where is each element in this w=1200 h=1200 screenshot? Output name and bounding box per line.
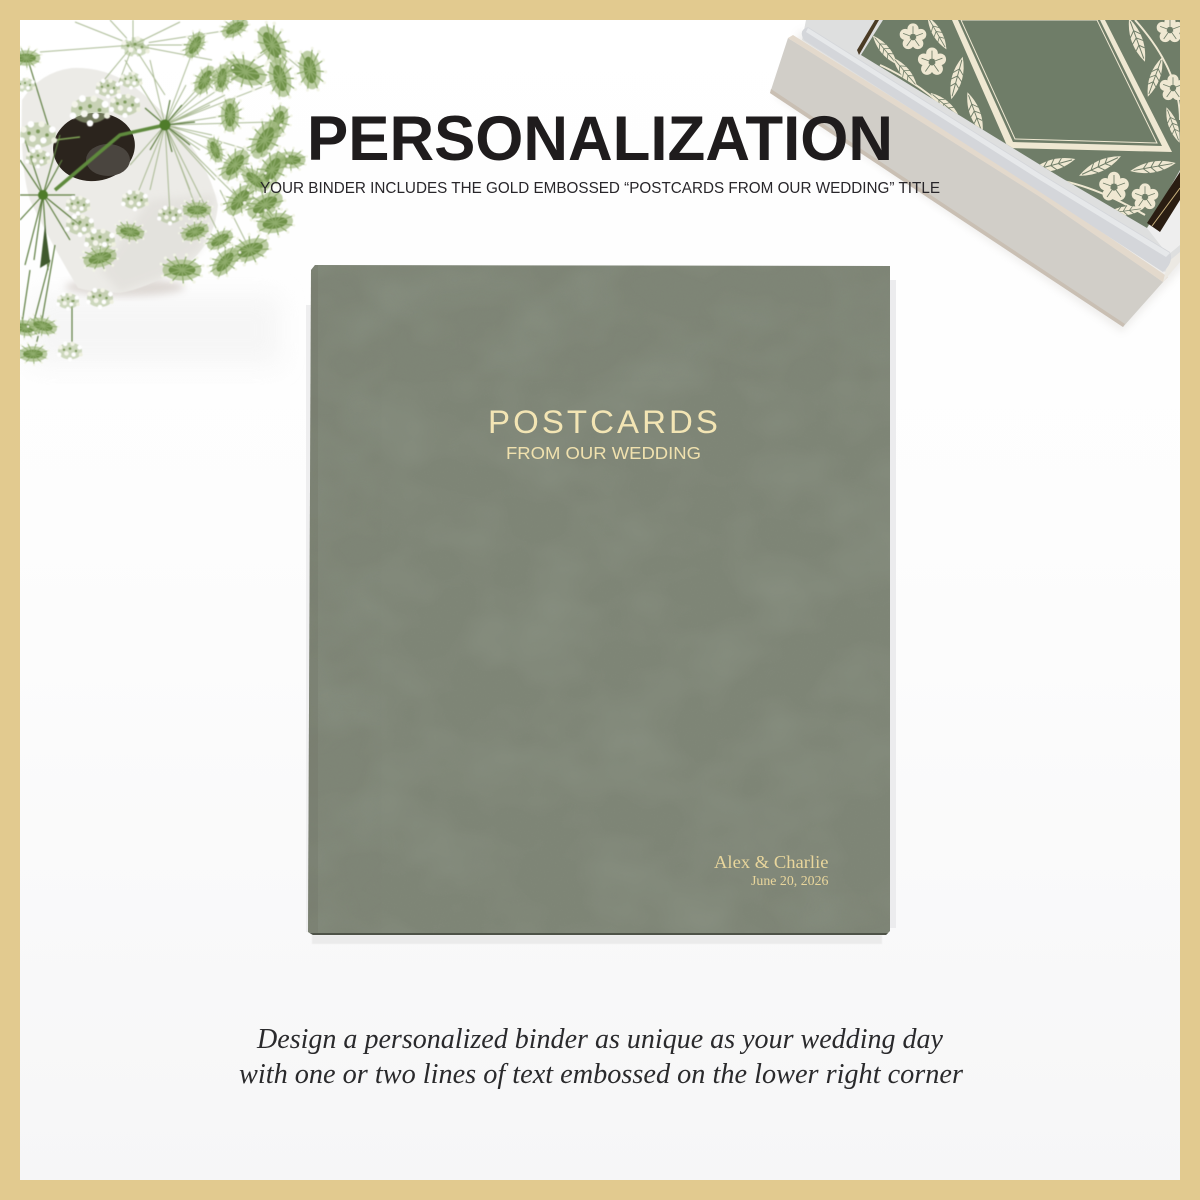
- binder title: postcards: POSTCARDS: [488, 404, 721, 440]
- box interior: [802, 20, 1180, 272]
- box inner rim: [802, 27, 1171, 272]
- photo: linen keepsake box with floral card: [770, 14, 1186, 332]
- subtitle: YOUR BINDER INCLUDES THE GOLD EMBOSSED “POSTCARDS FROM OUR WEDDING” TITLE: [260, 180, 940, 197]
- box linen wall: [770, 38, 1163, 327]
- date embossed on lower right: June 20, 2026: [751, 873, 829, 888]
- binder cast shadow: [306, 280, 896, 944]
- panel: sage leather binder: [308, 265, 890, 935]
- title: PERSONALIZATION: [307, 104, 893, 174]
- description text: Design a personalized binder as unique as your wedding day: [256, 1023, 943, 1055]
- description text: [239, 1023, 964, 1090]
- photo: ceramic vase with wild flowers: [7, 9, 330, 366]
- gold-edged binder ring: [1147, 172, 1180, 232]
- binder subtitle: from our wedding: FROM OUR WEDDING: [506, 443, 701, 463]
- names embossed on lower right: Alex & Charlie: [714, 852, 829, 872]
- floral card: [861, 20, 1180, 228]
- description text: with one or two lines of text embossed on the lower right corner: [239, 1058, 964, 1090]
